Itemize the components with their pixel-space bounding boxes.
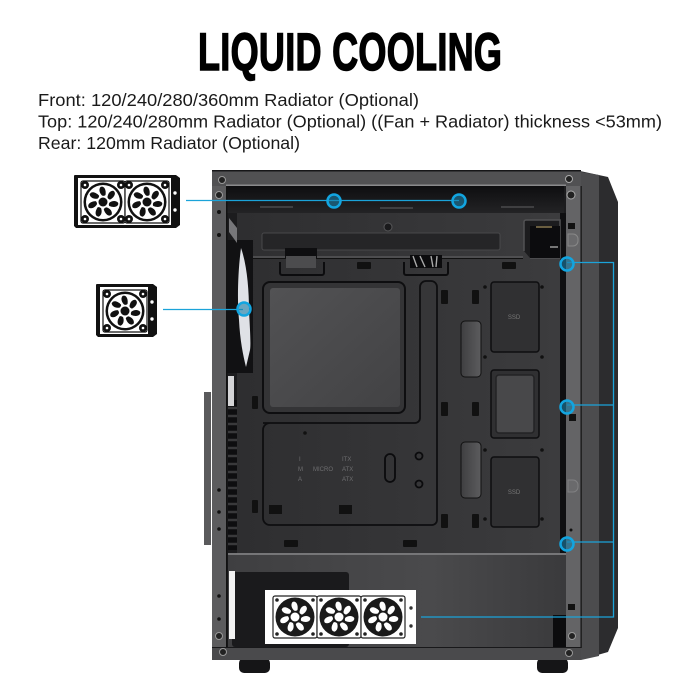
case interior back — [212, 171, 581, 660]
board size labels: MICRO — [313, 467, 333, 473]
cable slots — [461, 321, 481, 498]
radiator icon: rear 120mm — [96, 284, 157, 337]
cpu cutout — [263, 282, 405, 413]
ssd labels: SSD — [508, 315, 521, 321]
computer case — [204, 170, 618, 673]
board size labels: ATX — [342, 477, 353, 483]
text block: radiator support: Top: 120/240/280mm Radiator (Optional) ((Fan + Radiator) thickness <53mm) — [38, 112, 662, 132]
cable channel lines — [263, 281, 437, 525]
left rail — [212, 186, 228, 648]
right rail — [560, 186, 582, 648]
upper shelf — [253, 223, 523, 258]
top cavity — [226, 186, 564, 213]
rear fan — [227, 218, 253, 373]
ssd plates — [491, 282, 539, 527]
board size labels: ATX — [342, 467, 353, 473]
radiator icon: top 240mm — [74, 175, 180, 228]
ssd labels: SSD — [508, 490, 521, 496]
left vent ribs — [228, 376, 237, 550]
board size labels — [298, 457, 353, 483]
board size labels: M — [298, 467, 303, 473]
callout lines — [163, 200, 614, 617]
front panel — [580, 171, 618, 660]
ssd labels — [508, 315, 521, 496]
mounting holes — [252, 262, 544, 547]
case feet — [239, 658, 568, 673]
board size labels: ITX — [342, 457, 351, 463]
bottom bar — [212, 632, 581, 660]
board size labels: I — [299, 457, 301, 463]
board size labels: A — [298, 477, 302, 483]
left side bracket — [204, 392, 211, 545]
text block: radiator support: Rear: 120mm Radiator (Optional) — [38, 133, 300, 153]
standoff oval — [385, 452, 422, 488]
text block: radiator support: Front: 120/240/280/360mm Radiator (Optional) — [38, 90, 419, 110]
left grommet — [280, 248, 324, 275]
radiator icon: front 360mm — [265, 590, 416, 644]
psu shroud — [228, 553, 566, 648]
right grommet — [404, 255, 448, 275]
callout markers — [238, 194, 574, 550]
top bar — [212, 170, 581, 186]
top right cable bay — [524, 220, 560, 258]
title: LIQUID COOLING — [198, 22, 502, 82]
rear wall — [237, 212, 561, 556]
text block: radiator support — [38, 90, 662, 153]
